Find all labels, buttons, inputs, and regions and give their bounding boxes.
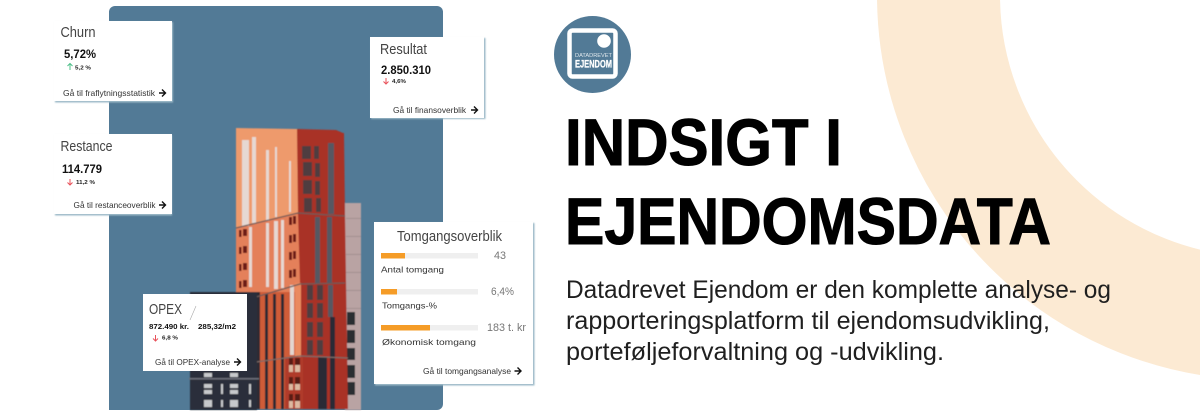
icon: red down arrow	[153, 335, 158, 341]
description text: Datadrevet Ejendom er den komplette analyse- og	[566, 276, 1111, 304]
icon: arrow	[471, 106, 478, 114]
bar: Tomgangs-%: 6,4%	[491, 286, 514, 298]
bar: Antal tomgang: Antal tomgang	[381, 264, 444, 274]
building illustration	[189, 128, 361, 410]
description text: porteføljeforvaltning og -udvikling.	[566, 338, 944, 366]
Tomgang title: Tomgangsoverblik	[397, 229, 503, 245]
main tower	[236, 128, 348, 409]
bar: Antal tomgang: 43	[494, 250, 506, 262]
icon: red down arrow	[384, 78, 388, 84]
vertical window bands on the red face	[315, 143, 334, 317]
title: INDSIGT I	[565, 105, 842, 179]
lower stripes	[257, 292, 300, 409]
icon: arrow	[159, 90, 166, 96]
bar: Antal tomgang	[381, 250, 506, 274]
Resultat change: 4,6%	[392, 79, 406, 85]
Churn link: Gå til fraflytningsstatistik	[63, 88, 156, 98]
Resultat link: Gå til finansoverblik	[393, 105, 467, 115]
icon: arrow	[234, 358, 240, 366]
OPEX title: OPEX	[149, 302, 182, 318]
logo: Datadrevet Ejendom	[554, 16, 631, 93]
description text	[566, 276, 1111, 366]
bar: Tomgangs-%: Tomgangs-%	[382, 300, 437, 310]
OPEX per m2: 285,32/m2	[198, 322, 236, 331]
Churn change: 5,2 %	[75, 66, 91, 72]
card: Tomgangsoverblik	[374, 222, 534, 386]
side tower grey strip	[345, 203, 361, 410]
windows on the red face	[302, 146, 323, 355]
icon: red down arrow	[68, 179, 72, 185]
Churn title: Churn	[60, 25, 96, 41]
panel: blue photo background	[109, 6, 443, 410]
Restance value: 114.779	[62, 162, 102, 176]
description text: rapporteringsplatform til ejendomsudvikling,	[566, 307, 1050, 335]
icon: arrow	[514, 368, 521, 374]
card: Restance	[54, 134, 172, 216]
OPEX total: 872.490 kr.	[149, 322, 189, 331]
OPEX link: Gå til OPEX-analyse	[155, 357, 230, 367]
Restance change: 11,2 %	[76, 180, 95, 186]
bar: Tomgangs-%	[381, 286, 514, 310]
card: Resultat	[370, 37, 486, 119]
bar: Økonomisk tomgang: 183 t. kr	[487, 322, 526, 334]
dark low building	[189, 292, 259, 410]
icon: green up arrow	[68, 64, 72, 70]
title: EJENDOMSDATA	[565, 184, 1051, 258]
Restance link: Gå til restanceoverblik	[74, 200, 156, 210]
title	[565, 105, 1051, 258]
logo: Datadrevet Ejendom: DATADREVET	[575, 53, 612, 59]
icon: arrow	[159, 202, 166, 208]
Resultat value: 2.850.310	[381, 65, 431, 77]
bar: Økonomisk tomgang	[381, 322, 526, 347]
logo: Datadrevet Ejendom: EJENDOM	[575, 58, 612, 70]
Restance title: Restance	[60, 139, 112, 155]
Resultat title: Resultat	[380, 42, 427, 58]
card: Churn	[54, 21, 173, 102]
Tomgang link: Gå til tomgangsanalyse	[423, 366, 511, 376]
small dark windows on the orange face	[239, 216, 296, 288]
Churn value: 5,72%	[64, 49, 96, 61]
OPEX change: 6,8 %	[162, 336, 178, 342]
card: OPEX	[143, 294, 247, 371]
light window columns on the orange face	[242, 137, 291, 289]
slash divider	[190, 306, 196, 320]
decorative peach arc background	[938, 0, 1200, 318]
bar: Økonomisk tomgang: Økonomisk tomgang	[382, 337, 476, 347]
